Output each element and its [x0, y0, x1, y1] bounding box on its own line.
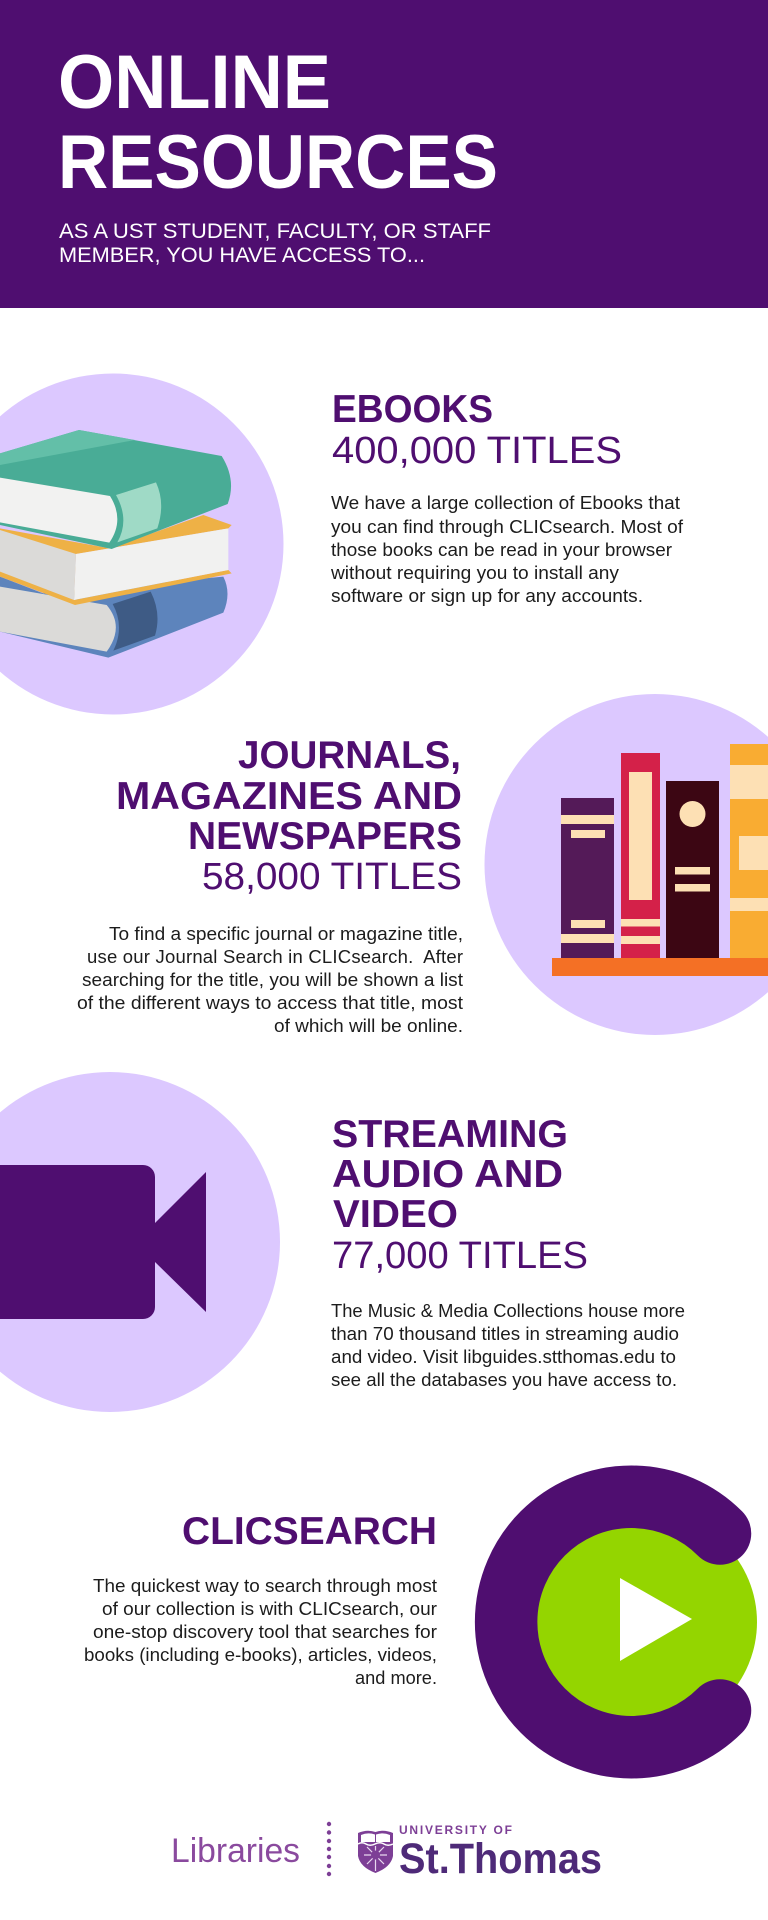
text block: journals description: To find a specific journal or magazine title,: [109, 923, 463, 944]
heading: journals, magazines and newspapers: [116, 734, 462, 858]
title: ONLINE: [58, 40, 331, 125]
icon: play triangle: [620, 1578, 692, 1661]
panel: streaming illustration: [0, 1072, 280, 1412]
panel: ebooks text: [330, 388, 684, 606]
heading: streaming audio and video: VIDEO: [333, 1193, 458, 1236]
text block: clicsearch description: of our collection is with CLICsearch, our: [102, 1598, 437, 1619]
icon: university shield: [358, 1831, 393, 1873]
panel: header banner: [0, 0, 768, 308]
icon: video camera: [0, 1165, 206, 1319]
text block: clicsearch description: one-stop discovery tool that searches for: [93, 1621, 437, 1642]
heading: journals, magazines and newspapers: JOURNALS,: [238, 734, 461, 777]
text block: journals description: [77, 923, 463, 1036]
text block: journals description: of the different ways to access that title, most: [77, 992, 463, 1013]
university of st thomas wordmark: St.Thomas: [399, 1835, 602, 1883]
header subtitle: AS A UST STUDENT, FACULTY, OR STAFF: [59, 220, 491, 243]
heading: clicsearch: CLICSEARCH: [182, 1510, 437, 1553]
dotted divider: [327, 1822, 331, 1876]
footer logos: [171, 1822, 602, 1883]
heading: journals, magazines and newspapers: MAGAZINES AND: [116, 775, 462, 818]
text block: ebooks description: software or sign up for any accounts.: [331, 585, 643, 606]
text block: streaming description: [331, 1300, 685, 1390]
heading: journals, magazines and newspapers: NEWSPAPERS: [188, 815, 462, 858]
heading: streaming audio and video: AUDIO AND: [332, 1153, 563, 1196]
text block: ebooks description: you can find through CLICsearch. Most of: [331, 516, 684, 537]
text block: streaming description: and video. Visit libguides.stthomas.edu to: [331, 1346, 676, 1367]
panel: clicsearch text: [84, 1510, 437, 1688]
text block: ebooks description: We have a large collection of Ebooks that: [331, 492, 680, 513]
panel: ebooks illustration: [0, 374, 284, 714]
icon: stack of books: [0, 430, 232, 658]
title: [58, 40, 498, 205]
text block: clicsearch description: books (including e-books), articles, videos,: [84, 1644, 437, 1665]
text block: clicsearch description: [84, 1575, 437, 1688]
panel: streaming text: [331, 1113, 685, 1390]
icon: clicsearch logo: [506, 1497, 757, 1747]
heading: streaming audio and video: [332, 1113, 568, 1236]
text block: journals description: searching for the title, you will be shown a list: [82, 969, 463, 990]
text block: streaming description: see all the databases you have access to.: [331, 1369, 677, 1390]
text block: ebooks description: [330, 492, 684, 606]
text block: ebooks description: those books can be read in your browser: [331, 539, 672, 560]
heading: streaming audio and video: STREAMING: [332, 1113, 568, 1156]
title: RESOURCES: [58, 120, 498, 205]
text block: ebooks description: without requiring you to install any: [330, 562, 620, 583]
header subtitle: MEMBER, YOU HAVE ACCESS TO...: [59, 244, 425, 267]
stat: 400,000 titles: 400,000 TITLES: [332, 430, 622, 472]
panel: journals text: [77, 734, 463, 1036]
stat: 77,000 titles: 77,000 TITLES: [332, 1235, 588, 1277]
header subtitle: [59, 220, 491, 267]
university of st thomas wordmark: UNIVERSITY OF: [399, 1823, 512, 1837]
text block: clicsearch description: The quickest way to search through most: [93, 1575, 437, 1596]
text block: streaming description: The Music & Media Collections house more: [331, 1300, 685, 1321]
text block: journals description: of which will be online.: [274, 1015, 463, 1036]
text block: streaming description: than 70 thousand titles in streaming audio: [331, 1323, 679, 1344]
icon: books on shelf: [552, 744, 768, 976]
text block: clicsearch description: and more.: [355, 1667, 437, 1688]
panel: journals illustration: [484, 694, 768, 1035]
libraries wordmark: Libraries: [171, 1832, 300, 1870]
heading: ebooks: EBOOKS: [332, 388, 493, 431]
text block: journals description: use our Journal Search in CLICsearch. After: [87, 946, 463, 967]
stat: 58,000 titles: 58,000 TITLES: [202, 856, 462, 898]
